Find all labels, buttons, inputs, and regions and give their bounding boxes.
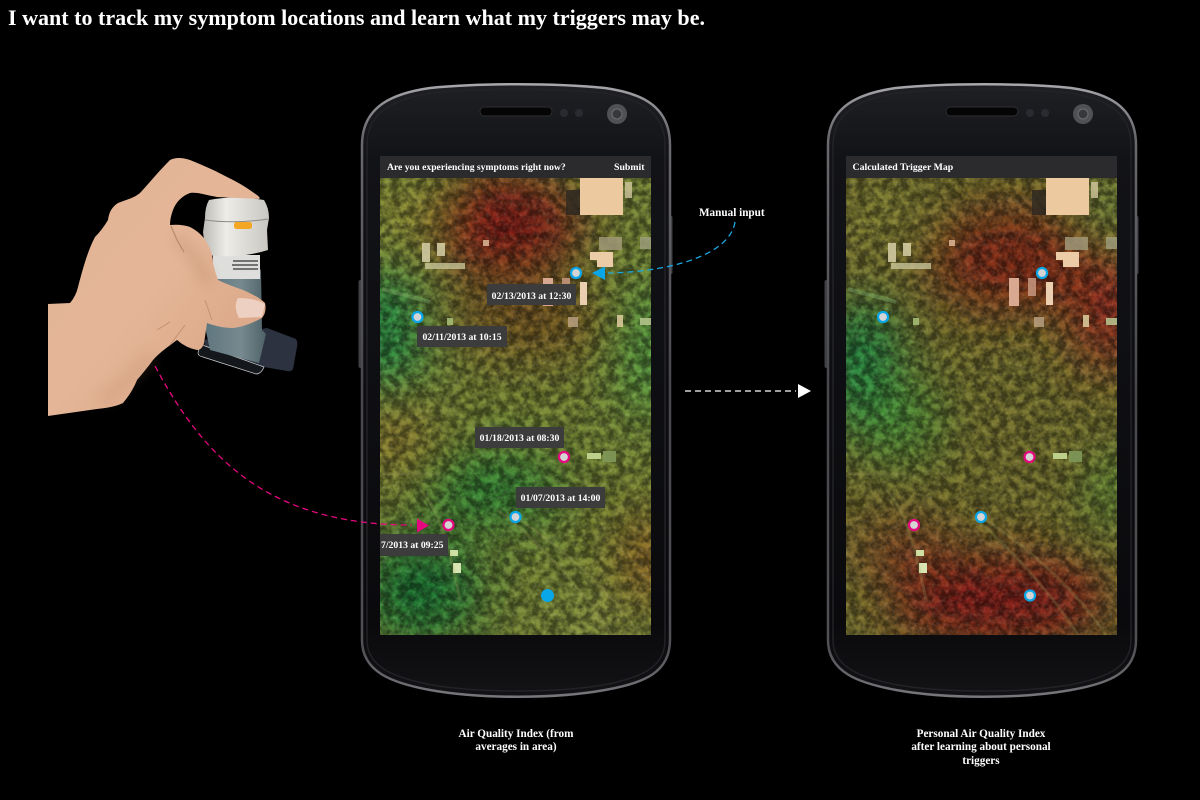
title: I want to track my symptom locations and learn what my triggers may be. bbox=[8, 5, 705, 30]
marker: blue bottom bbox=[1025, 590, 1035, 600]
marker: blue upper right bbox=[1037, 268, 1047, 278]
inhaler label canister bbox=[213, 255, 260, 279]
map: personal trigger heat map bbox=[846, 178, 1117, 635]
marker: pink center bbox=[1024, 452, 1034, 462]
marker: pink 01/18 bbox=[559, 452, 569, 462]
arrow: from air quality map to trigger map bbox=[685, 384, 811, 398]
callout: clipped date: 7/2013 at 09:25 bbox=[381, 540, 444, 551]
caption: personal air quality index: triggers bbox=[962, 755, 1000, 767]
inhaler base bbox=[198, 343, 264, 374]
callout: 01/07/2013 bbox=[516, 487, 605, 508]
inhaler white sensor cap bbox=[203, 198, 269, 256]
illustration: hand holding smart inhaler bbox=[48, 158, 297, 416]
amber status light bbox=[234, 222, 252, 229]
callout: clipped date bbox=[380, 534, 448, 556]
hand bbox=[48, 158, 266, 416]
callout: 02/13/2013 bbox=[487, 284, 576, 305]
callout: 02/13/2013: 02/13/2013 at 12:30 bbox=[492, 291, 571, 302]
marker: current location bbox=[541, 589, 554, 602]
label: manual input: Manual input bbox=[699, 207, 765, 219]
caption: air quality index: averages in area) bbox=[475, 741, 557, 753]
caption: air quality index: Air Quality Index (from bbox=[459, 728, 574, 740]
inhaler mouthpiece bbox=[204, 328, 297, 371]
callout: 01/18/2013: 01/18/2013 at 08:30 bbox=[480, 433, 559, 444]
marker: blue 01/07 bbox=[510, 512, 520, 522]
marker: blue 02/11 bbox=[412, 312, 422, 322]
phone: air quality index map bbox=[349, 84, 680, 697]
marker: pink clipped date bbox=[444, 520, 454, 530]
caption: personal air quality index: Personal Air Quality Index bbox=[917, 728, 1046, 740]
callout: 02/11/2013 bbox=[417, 326, 507, 347]
map: air quality heat map bbox=[380, 178, 651, 635]
marker: blue left bbox=[878, 312, 888, 322]
marker: blue 02/13 bbox=[571, 268, 581, 278]
header bar title: Calculated Trigger Map bbox=[852, 162, 954, 173]
inhaler grey body bbox=[204, 268, 266, 363]
callout: 02/11/2013: 02/11/2013 at 10:15 bbox=[422, 332, 502, 343]
header bar text: question: Are you experiencing symptoms right now? bbox=[387, 162, 566, 173]
phone: calculated trigger map bbox=[822, 84, 1150, 697]
arrow: manual input to marker bbox=[592, 222, 735, 280]
header bar action: submit: Submit bbox=[614, 162, 645, 173]
callout: 01/07/2013: 01/07/2013 at 14:00 bbox=[521, 493, 600, 504]
callout: 01/18/2013 bbox=[475, 427, 564, 448]
arrow: inhaler to map marker bbox=[155, 366, 429, 532]
caption: personal air quality index: after learning about personal bbox=[911, 741, 1051, 753]
marker: pink lower left bbox=[909, 520, 919, 530]
marker: blue lower center bbox=[976, 512, 986, 522]
